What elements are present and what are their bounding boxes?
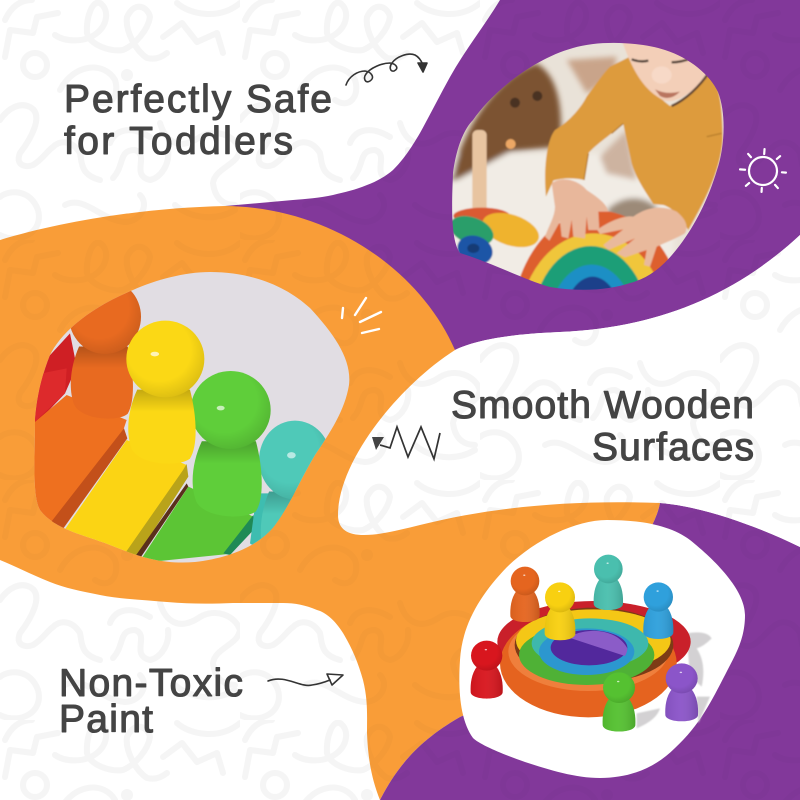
green arch — [519, 625, 654, 685]
red peg — [471, 641, 503, 699]
stacking post toy — [452, 128, 540, 263]
heading: Non-Toxic Paint: Paint — [59, 698, 153, 741]
heading: Perfectly Safe for Toddlers: for Toddlers — [64, 120, 293, 163]
toddler face — [622, 40, 711, 101]
teal peg — [594, 555, 623, 610]
yellow arch — [516, 609, 671, 672]
toddler sweater — [545, 57, 723, 230]
icon: sparkle lines — [342, 298, 381, 333]
heading: Smooth Wooden Surfaces: Surfaces — [592, 426, 754, 469]
blue arch — [539, 628, 634, 675]
purple center — [551, 630, 627, 665]
purple wave: bottom right — [380, 503, 800, 800]
purple wave: top — [225, 0, 800, 350]
white wave: middle right — [338, 235, 800, 547]
teal arch — [250, 493, 294, 545]
orange peg — [510, 567, 540, 622]
shadows — [637, 632, 712, 728]
photo: toddler stacking rainbow — [452, 42, 724, 290]
orange arch — [500, 609, 677, 717]
green peg — [191, 371, 271, 517]
orange peg — [70, 291, 141, 418]
yellow peg — [545, 582, 575, 640]
teal peg — [259, 420, 326, 539]
teal arch — [532, 618, 648, 668]
blurred room background — [452, 54, 672, 276]
heading: Smooth Wooden Surfaces — [451, 384, 754, 469]
stacked rainbow arches — [520, 210, 669, 290]
orange arch — [33, 395, 127, 523]
yellow arch — [63, 440, 187, 557]
arrow: loopy curl — [346, 54, 427, 85]
arrow: wavy — [268, 674, 343, 685]
orange wave: center — [0, 206, 660, 800]
heading: Non-Toxic Paint — [59, 662, 243, 741]
blue peg — [643, 582, 673, 639]
arrow: zigzag — [372, 427, 440, 459]
yellow peg — [126, 321, 204, 464]
toddler hands — [545, 179, 608, 241]
heading: Perfectly Safe for Toddlers: Perfectly Safe — [64, 78, 332, 121]
photo: pegs on rainbow closeup — [34, 272, 350, 562]
red arch — [35, 334, 75, 422]
heading: Non-Toxic Paint: Non-Toxic — [59, 662, 243, 705]
heading: Smooth Wooden Surfaces: Smooth Wooden — [451, 384, 754, 427]
purple peg — [665, 663, 698, 721]
green arch — [135, 483, 188, 558]
photo: rainbow set with pegs — [459, 520, 745, 778]
red back arch — [497, 601, 691, 682]
heading: Perfectly Safe for Toddlers — [64, 78, 332, 163]
green peg — [603, 672, 635, 732]
icon: sun — [739, 147, 787, 194]
